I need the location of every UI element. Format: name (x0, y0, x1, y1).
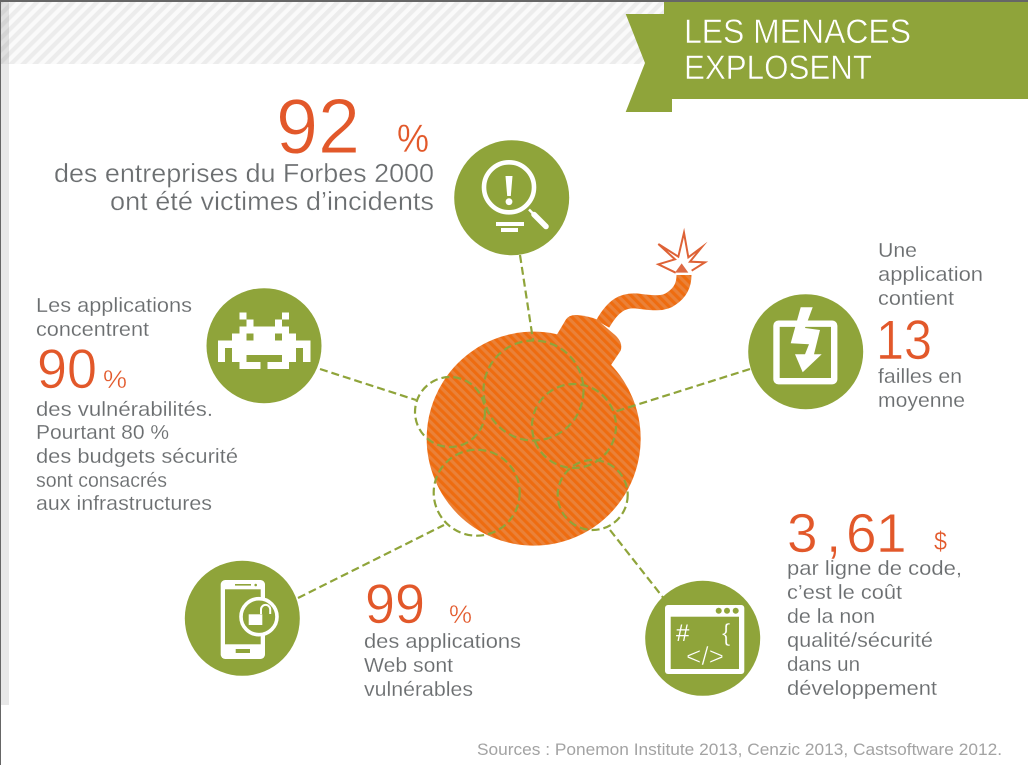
stat: 92 %: ont été victimes d’incidents (110, 186, 434, 216)
stat: 92 %: 92 (276, 82, 360, 170)
stat: 99 % (364, 572, 521, 701)
stat: 99 %: des applications (364, 631, 521, 653)
stat: 90 %: concentrent (36, 319, 149, 341)
stat: 3,61 $: dans un (787, 654, 860, 676)
icon: space invader (206, 288, 322, 403)
icon: code window: # (676, 620, 690, 647)
stat: 3,61 $: par ligne de code, (787, 558, 962, 580)
bomb (427, 233, 705, 546)
title: EXPLOSENT (684, 49, 872, 87)
stat: 90 %: Pourtant 80 % (36, 422, 169, 444)
stat: 13: Une (878, 240, 917, 262)
icon: lightning box (748, 294, 863, 409)
stat: 3,61 $: de la non (787, 606, 875, 628)
dashed circles on bomb (415, 340, 628, 536)
stat: 13: failles en (878, 366, 962, 388)
stat: 3,61 $: 3,61 (787, 502, 907, 564)
stat: 90 %: % (103, 366, 127, 394)
stat: 90 %: sont consacrés (36, 470, 167, 492)
stat: 3,61 $: c’est le coût (787, 582, 902, 604)
stat: 13: application (878, 264, 983, 286)
stat: 3,61 $: qualité/sécurité (787, 630, 933, 652)
stat: 3,61 $ (787, 502, 962, 700)
icon: code window: { (722, 619, 730, 647)
stat: 3,61 $: $ (934, 526, 947, 556)
stat: 90 %: des budgets sécurité (36, 446, 238, 468)
stat: 92 %: % (397, 118, 429, 161)
stat: 99 %: Web sont (364, 655, 453, 677)
stat: 13: 13 (876, 308, 932, 371)
bomb body (427, 332, 641, 546)
spark (658, 233, 705, 273)
sources: Sources : Ponemon Institute 2013, Cenzic 2013, Castsoftware 2012. (477, 740, 1002, 759)
icon: code window: </> (686, 641, 724, 671)
title (684, 13, 911, 87)
stat: 99 %: 99 (365, 572, 425, 635)
stat: 3,61 $: développement (787, 678, 937, 700)
stat: 92 %: des entreprises du Forbes 2000 (54, 158, 434, 188)
title banner (626, 2, 1028, 112)
stat: 99 %: vulnérables (364, 679, 473, 701)
stat: 90 % (36, 295, 238, 515)
stat: 13: contient (878, 288, 954, 310)
stat: 13: moyenne (878, 390, 965, 412)
bomb fuse (603, 275, 684, 324)
icon: code window (645, 581, 760, 696)
stat: 90 %: Les applications (36, 295, 192, 317)
stat: 13 (876, 240, 983, 412)
bomb neck (557, 315, 621, 367)
stat: 90 %: 90 (37, 337, 97, 400)
title: LES MENACES (684, 13, 911, 51)
stat: 99 %: % (449, 601, 472, 629)
icon: magnifier alert (454, 140, 569, 255)
connector lines (298, 255, 750, 600)
stat: 92 % (54, 82, 434, 216)
stat: 90 %: des vulnérabilités. (36, 399, 213, 421)
icon: phone with open lock (185, 561, 300, 676)
stat: 90 %: aux infrastructures (36, 493, 212, 515)
